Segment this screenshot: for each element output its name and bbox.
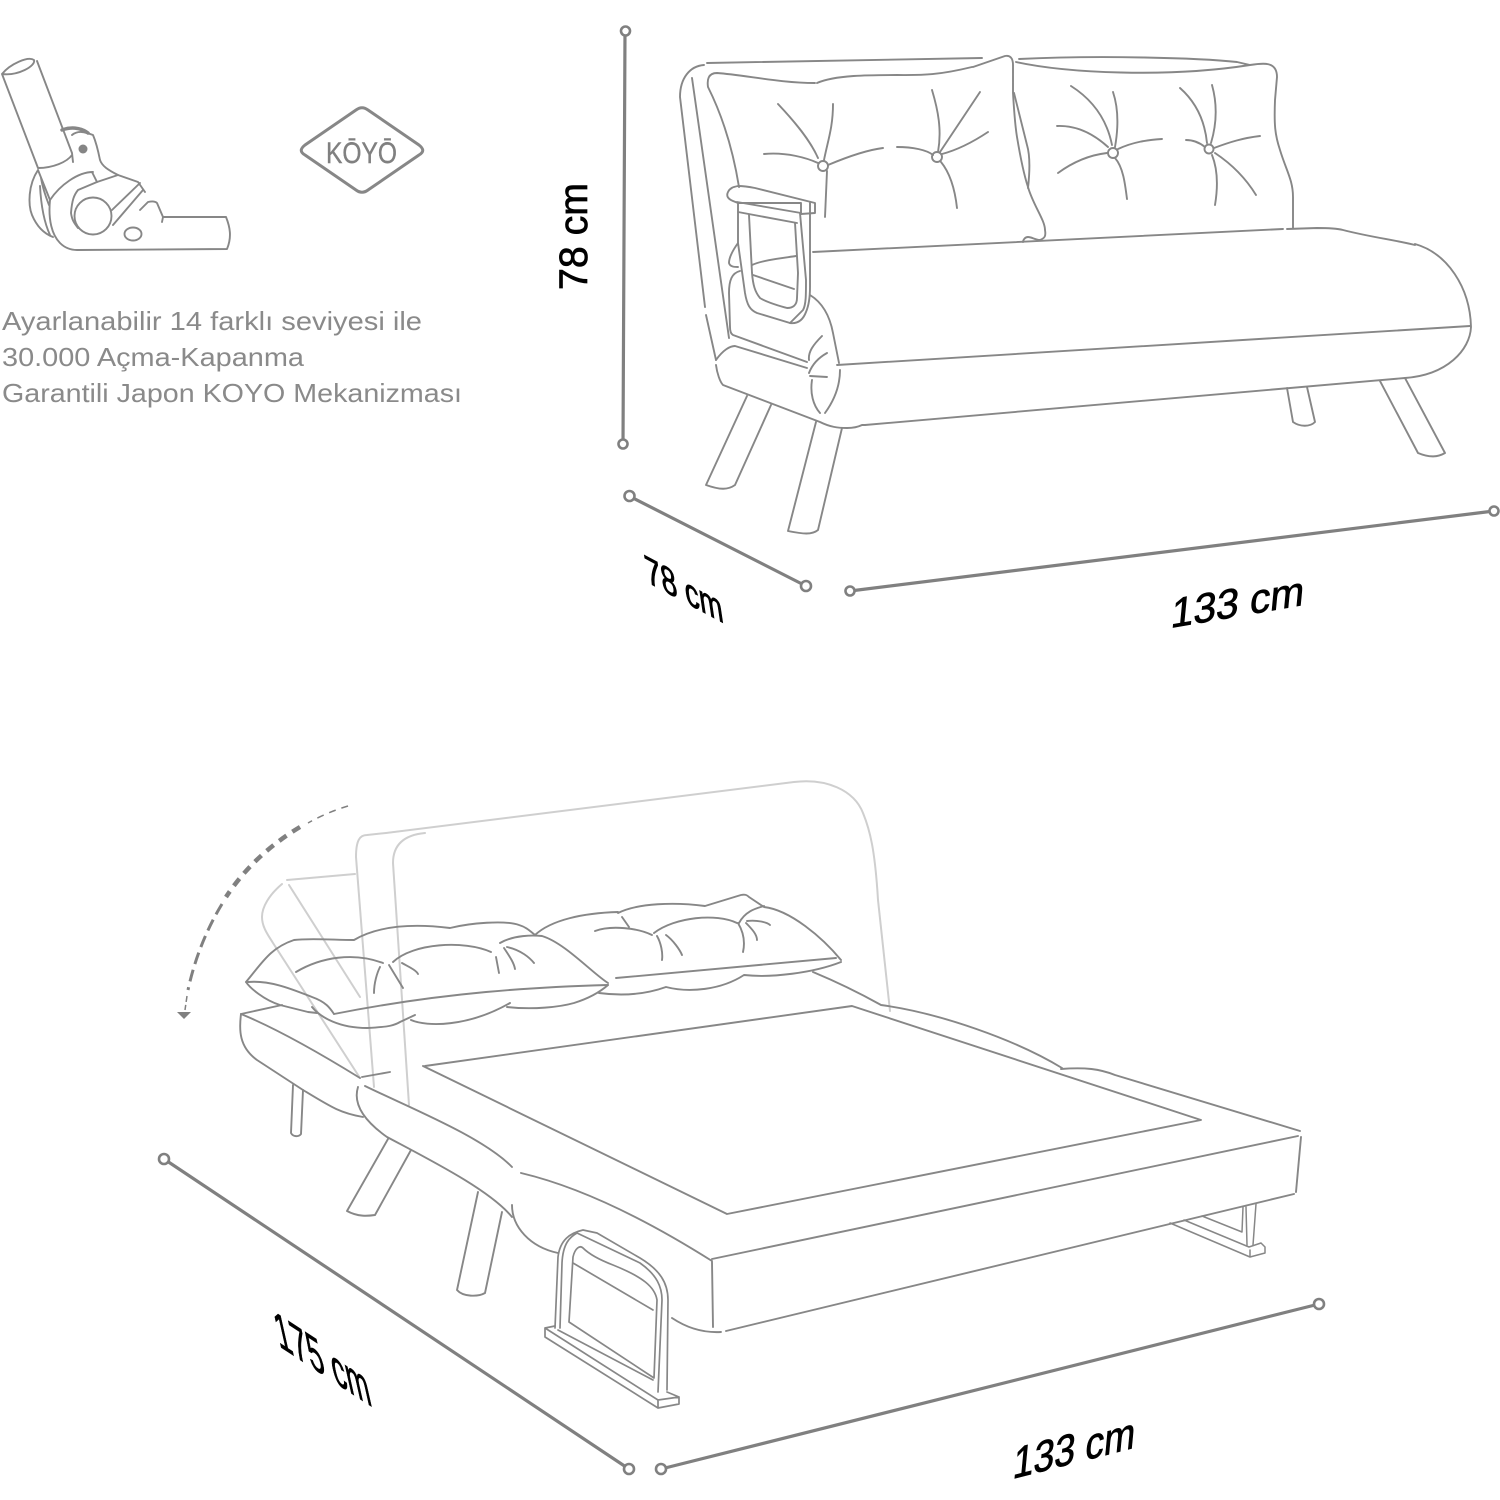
icon: KOYO mechanism [2, 59, 230, 250]
back handle frame [1170, 1204, 1265, 1257]
arrow: backrest folding direction [177, 806, 348, 1019]
text block: mechanism description: Ayarlanabilir 14 farklı seviyesi ile [2, 306, 422, 336]
dimension: bed length 175 cm [159, 1154, 634, 1474]
front handle frame [545, 1230, 679, 1408]
dimension: sofa height 78 cm: 78 cm [552, 183, 596, 290]
sofa illustration [680, 56, 1471, 534]
sofa legs [706, 378, 1445, 534]
dimension: bed width 133 cm: 133 cm [1011, 1407, 1138, 1489]
backrest frame [680, 58, 982, 360]
front pillow [246, 922, 608, 1028]
left cushion [708, 56, 1045, 242]
text block: mechanism description: 30.000 Açma-Kapanma [2, 342, 305, 372]
dimension: sofa height 78 cm [552, 26, 630, 448]
dimension: sofa width 133 cm: 133 cm [1169, 567, 1307, 637]
bed legs [347, 1139, 502, 1296]
dimension: bed width 133 cm [656, 1299, 1324, 1489]
back pillow [535, 895, 841, 994]
logo text: KŌYŌ [326, 137, 397, 170]
seat and base [716, 228, 1471, 428]
armrest [727, 186, 815, 323]
bed illustration [240, 895, 1301, 1408]
folded left section [240, 1005, 390, 1136]
logo: KOYO [301, 108, 423, 192]
bed illustration: ghost backrest [262, 781, 890, 1105]
right cushion [1016, 57, 1293, 228]
centre seam and side rail [357, 1086, 712, 1261]
mattress [423, 972, 1301, 1332]
dimension: bed length 175 cm: 175 cm [268, 1298, 376, 1419]
dimension: sofa depth 78 cm: 78 cm [642, 546, 726, 632]
text block: mechanism description: Garantili Japon KOYO Mekanizması [2, 378, 462, 408]
dimension: sofa width 133 cm [846, 506, 1498, 637]
text block: mechanism description [2, 306, 462, 408]
dimension: sofa depth 78 cm [624, 491, 811, 632]
